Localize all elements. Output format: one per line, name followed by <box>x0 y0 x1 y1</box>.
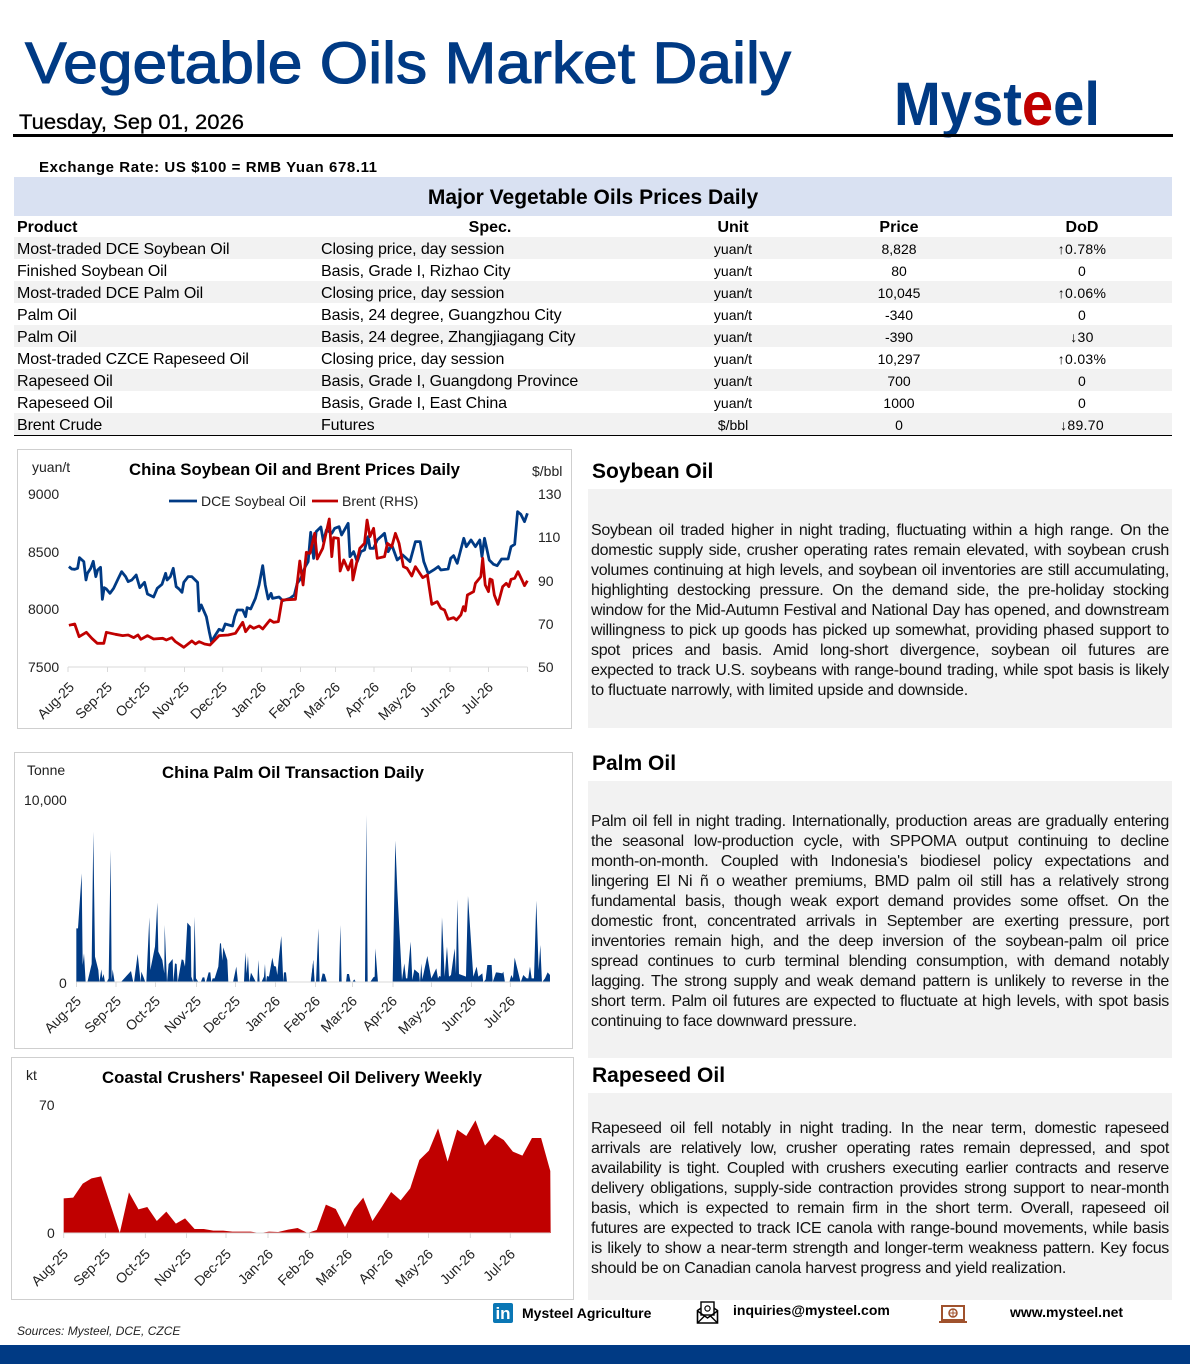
heading: rapeseed oil: Rapeseed Oil <box>592 1064 725 1087</box>
row 7 <box>14 369 1172 391</box>
row 8 <box>17 395 1086 412</box>
x axis labels: Mar-26 <box>300 679 343 721</box>
row 6: Closing price, day session <box>321 351 504 368</box>
row 8: 1000 <box>883 395 915 411</box>
text: palm oil commentary: short term. Palm oil futures are expected to fluctuate at high levels, with spot basis <box>591 993 1169 1010</box>
text: palm oil commentary: inventories remain high, and the deep inversion of the soybean-palm oil price <box>591 933 1169 950</box>
footer: website: www.mysteel.net <box>1010 1304 1123 1320</box>
x axis labels: Dec-25 <box>187 679 230 722</box>
panel: soybean oil chart <box>17 449 572 729</box>
text: soybean oil commentary: expected to track U.S. soybeans with range-bound trading, while spot basis is likely <box>591 662 1169 679</box>
text: soybean oil commentary: willingness to pick up goods has picked up somewhat, providing phased support to <box>591 622 1169 639</box>
chart title: Coastal Crushers' Rapeseel Oil Delivery Weekly <box>102 1069 483 1087</box>
row 1: 8,828 <box>881 241 917 257</box>
chart: palm oil transaction: 0 <box>59 975 67 991</box>
text: soybean oil commentary: volumes continuing at high levels, and soybean oil inventories are still accumulating, <box>591 562 1169 579</box>
row 3: Closing price, day session <box>321 285 504 302</box>
x axis labels: Aug-25 <box>28 1246 71 1289</box>
table header: Product <box>17 219 77 236</box>
x axis labels: May-26 <box>375 679 419 723</box>
row 1: Closing price, day session <box>321 241 504 258</box>
row 9: Brent Crude <box>17 417 102 434</box>
row 3: ↑0.06% <box>1058 285 1106 301</box>
x axis labels: Apr-26 <box>341 679 382 720</box>
row 3 <box>14 281 1172 303</box>
x axis labels: Sep-25 <box>70 1246 113 1289</box>
x axis labels: Jun-26 <box>417 679 458 720</box>
icon: linkedin: in <box>495 1304 511 1323</box>
text: soybean oil commentary: to fluctuate narrowly, with limited upside and downside. <box>591 682 968 699</box>
text: rapeseed oil commentary: should be on Canadian canola harvest progress and yield realization. <box>591 1260 1066 1277</box>
row 5 <box>14 325 1172 347</box>
chart: soybean oil and brent prices: 7500 <box>28 659 59 675</box>
row 1 <box>14 237 1172 259</box>
row 6: 10,297 <box>878 351 920 367</box>
price table <box>14 219 1172 436</box>
x axis labels: Feb-26 <box>265 679 308 721</box>
text: palm oil commentary: continuing to face downward pressure. <box>591 1013 857 1030</box>
area: weekly delivery <box>64 1120 551 1233</box>
text: soybean oil commentary <box>591 522 1170 699</box>
footer bar <box>0 1345 1190 1364</box>
text: palm oil commentary: the seasonal low-production cycle, with SPPOMA output continuing to decline <box>591 833 1169 850</box>
footer: email: inquiries@mysteel.com <box>733 1302 890 1318</box>
row 5: yuan/t <box>714 329 752 345</box>
row 9: $/bbl <box>718 417 748 433</box>
x axis labels: Jul-26 <box>458 679 496 717</box>
legend <box>169 493 418 509</box>
row 5: ↓30 <box>1070 329 1094 345</box>
heading: palm oil: Palm Oil <box>592 752 676 775</box>
panel: soybean oil background <box>588 489 1172 728</box>
row 9: ↓89.70 <box>1060 417 1104 433</box>
x axis labels: Jan-26 <box>235 1246 276 1287</box>
chart: soybean oil and brent prices: 110 <box>538 529 561 545</box>
chart: palm oil transaction: 10,000 <box>24 792 67 808</box>
table header <box>17 219 1098 236</box>
x axis labels <box>41 993 518 1037</box>
text: rapeseed oil commentary: futures are expected to track ICE canola with range-bound movements, while basis <box>591 1220 1169 1237</box>
line: DCE soybean oil <box>69 512 527 642</box>
text: soybean oil commentary: window for the Mid-Autumn Festival and National Day has opened, and downstream <box>591 602 1169 619</box>
x axis labels: Jun-26 <box>438 993 479 1034</box>
table header: Unit <box>717 219 749 236</box>
text: rapeseed oil commentary: arrivals are relatively low, crusher operating rates remain depressed, and spot <box>591 1140 1169 1157</box>
row 3: yuan/t <box>714 285 752 301</box>
chart: soybean oil and brent prices: 8500 <box>28 544 59 560</box>
x axis labels: Oct-25 <box>112 679 153 720</box>
row 9: 0 <box>895 417 903 433</box>
text: soybean oil commentary: domestic supply side, crusher operating rates remain elevated, with soybean crush <box>591 542 1169 559</box>
chart: soybean oil and brent prices: 70 <box>538 616 554 632</box>
row 1: ↑0.78% <box>1058 241 1106 257</box>
row 8: 0 <box>1078 395 1086 411</box>
table header: DoD <box>1066 219 1098 236</box>
legend: DCE Soybeal Oil <box>201 493 306 509</box>
panel: palm oil chart <box>14 752 573 1049</box>
row 3: Most-traded DCE Palm Oil <box>17 285 203 302</box>
chart: rapeseed oil delivery: kt <box>26 1067 37 1083</box>
text: rapeseed oil commentary: basis, which is expected to remain firm in the short term. Overall, rapeseed oil <box>591 1200 1169 1217</box>
date: Tuesday, Sep 01, 2026 <box>19 111 244 134</box>
text: rapeseed oil commentary: is likely to show a near-term strength and longer-term weakness pattern. Key focus <box>591 1240 1169 1257</box>
row 4: Basis, 24 degree, Guangzhou City <box>321 307 562 324</box>
x axis labels: Nov-25 <box>151 1246 194 1289</box>
row 1: yuan/t <box>714 241 752 257</box>
chart: soybean oil and brent prices: 50 <box>538 659 554 675</box>
icon: laptop <box>939 1305 967 1323</box>
row 8: Rapeseed Oil <box>17 395 113 412</box>
x axis labels: Apr-26 <box>359 993 400 1034</box>
x axis labels: Jan-26 <box>228 679 269 720</box>
x axis labels: May-26 <box>395 993 439 1037</box>
text: palm oil commentary: Palm oil fell in night trading. Internationally, production areas are gradually entering <box>591 813 1169 830</box>
legend: Brent (RHS) <box>342 493 418 509</box>
text: palm oil commentary: lagging. The strong supply and weak demand pattern is unlikely to reverse in the <box>591 973 1169 990</box>
x axis labels: May-26 <box>392 1246 436 1290</box>
x axis labels: Aug-25 <box>34 679 77 722</box>
row 7: Basis, Grade I, Guangdong Province <box>321 373 578 390</box>
x axis labels: Feb-26 <box>280 993 323 1035</box>
row 2: Basis, Grade I, Rizhao City <box>321 263 510 280</box>
row 9 <box>14 413 1172 436</box>
x axis labels: Nov-25 <box>149 679 192 722</box>
row 3: 10,045 <box>878 285 920 301</box>
row 5: -390 <box>885 329 913 345</box>
row 6 <box>17 351 1106 368</box>
text: soybean oil commentary: Soybean oil traded higher in night trading, fluctuating within a high range. On the <box>591 522 1169 539</box>
text: rapeseed oil commentary <box>591 1120 1170 1277</box>
row 6: Most-traded CZCE Rapeseed Oil <box>17 351 249 368</box>
chart: soybean oil and brent prices: yuan/t <box>32 459 70 475</box>
row 6: ↑0.03% <box>1058 351 1106 367</box>
table title band: Major Vegetable Oils Prices Daily <box>428 186 758 209</box>
table header: Price <box>879 219 919 236</box>
chart: rapeseed oil delivery: 0 <box>47 1225 55 1241</box>
x axis labels: Mar-26 <box>312 1246 355 1288</box>
panel: rapeseed oil chart <box>11 1057 574 1300</box>
row 6: yuan/t <box>714 351 752 367</box>
area: daily transactions <box>76 815 550 982</box>
chart title: China Palm Oil Transaction Daily <box>162 764 425 782</box>
footer: linkedin name: Mysteel Agriculture <box>522 1305 651 1321</box>
text: palm oil commentary: lingering El Ni ñ o weather premiums, BMD palm oil still has a relatively strong <box>591 873 1169 890</box>
text: palm oil commentary: domestic front, concentrated arrivals in September are exerting pressure, port <box>591 913 1169 930</box>
table title band <box>14 177 1172 216</box>
row 4: 0 <box>1078 307 1086 323</box>
logo: Mysteel: Mysteel <box>894 70 1100 138</box>
row 9: Futures <box>321 417 375 434</box>
exchange rate: Exchange Rate: US $100 = RMB Yuan 678.11 <box>39 159 377 176</box>
row 8: yuan/t <box>714 395 752 411</box>
x axis labels: Dec-25 <box>191 1246 234 1289</box>
x axis labels: Jan-26 <box>242 993 283 1034</box>
row 7: Rapeseed Oil <box>17 373 113 390</box>
row 7: yuan/t <box>714 373 752 389</box>
text: palm oil commentary: month-on-month. Coupled with Indonesia's biodiesel policy expectations and <box>591 853 1169 870</box>
chart: soybean oil and brent prices: 90 <box>538 573 554 589</box>
x axis labels: Nov-25 <box>161 993 204 1036</box>
row 2: yuan/t <box>714 263 752 279</box>
panel: rapeseed oil background <box>588 1093 1172 1300</box>
chart: soybean oil and brent prices: 9000 <box>28 486 59 502</box>
x axis labels: Jul-26 <box>480 1246 518 1284</box>
x axis labels: Mar-26 <box>317 993 360 1035</box>
x axis labels <box>34 679 496 723</box>
text: rapeseed oil commentary: Rapeseed oil fell notably in night trading. In the near term, domestic rapeseed <box>591 1120 1169 1137</box>
chart: palm oil transaction: Tonne <box>27 762 65 778</box>
row 4 <box>17 307 1086 324</box>
x axis labels: Dec-25 <box>200 993 243 1036</box>
text: palm oil commentary: fundamental basis, though weak export demand provides some offset. On the <box>591 893 1169 910</box>
heading: soybean oil: Soybean Oil <box>592 460 713 483</box>
x axis labels <box>28 1246 518 1290</box>
x axis labels: Oct-25 <box>112 1246 153 1287</box>
row 4: Palm Oil <box>17 307 77 324</box>
row 4: yuan/t <box>714 307 752 323</box>
title: Vegetable Oils Market Daily <box>25 31 791 96</box>
row 8: Basis, Grade I, East China <box>321 395 507 412</box>
chart: rapeseed oil delivery: 70 <box>39 1097 55 1113</box>
panel: palm oil background <box>588 781 1172 1058</box>
row 2: 0 <box>1078 263 1086 279</box>
chart: soybean oil and brent prices: 8000 <box>28 601 59 617</box>
row 5: Palm Oil <box>17 329 77 346</box>
x axis labels: Sep-25 <box>72 679 115 722</box>
line: Brent <box>69 519 527 647</box>
table header: Spec. <box>469 219 511 236</box>
icon: envelope <box>696 1301 718 1324</box>
x axis labels: Apr-26 <box>355 1246 396 1287</box>
x axis labels: Sep-25 <box>81 993 124 1036</box>
text: rapeseed oil commentary: availability is tight. Coupled with crushers executing earlier contracts and reserve <box>591 1160 1169 1177</box>
text: soybean oil commentary: spot prices and basis. Amid long-short divergence, soybean oil futures are <box>591 642 1169 659</box>
x axis labels: Aug-25 <box>41 993 84 1036</box>
header <box>19 31 1100 138</box>
row 2: 80 <box>891 263 907 279</box>
text: palm oil commentary: spread continues to curb terminal blending consumption, with demand notably <box>591 953 1169 970</box>
x axis labels: Jun-26 <box>437 1246 478 1287</box>
row 1: Most-traded DCE Soybean Oil <box>17 241 230 258</box>
chart title: China Soybean Oil and Brent Prices Daily <box>129 461 461 479</box>
chart: soybean oil and brent prices: 130 <box>538 486 562 502</box>
row 5: Basis, 24 degree, Zhangjiagang City <box>321 329 575 346</box>
row 4: -340 <box>885 307 913 323</box>
text: palm oil commentary <box>591 813 1170 1030</box>
text: rapeseed oil commentary: delivery obligations, supply-side contraction provides strong support to near-month <box>591 1180 1169 1197</box>
series: DCE soybean oil and Brent <box>69 512 527 647</box>
text: soybean oil commentary: highlighting destocking pressure. On the demand side, the pre-holiday stocking <box>591 582 1169 599</box>
row 7: 0 <box>1078 373 1086 389</box>
row 2: Finished Soybean Oil <box>17 263 167 280</box>
chart: soybean oil and brent prices: $/bbl <box>532 463 562 479</box>
x axis labels: Jul-26 <box>480 993 518 1031</box>
row 2 <box>17 263 1086 280</box>
x axis labels: Feb-26 <box>274 1246 317 1288</box>
x axis labels: Oct-25 <box>122 993 163 1034</box>
header rule <box>13 134 1173 137</box>
row 7: 700 <box>887 373 911 389</box>
sources note: Sources: Mysteel, DCE, CZCE <box>17 1324 180 1338</box>
